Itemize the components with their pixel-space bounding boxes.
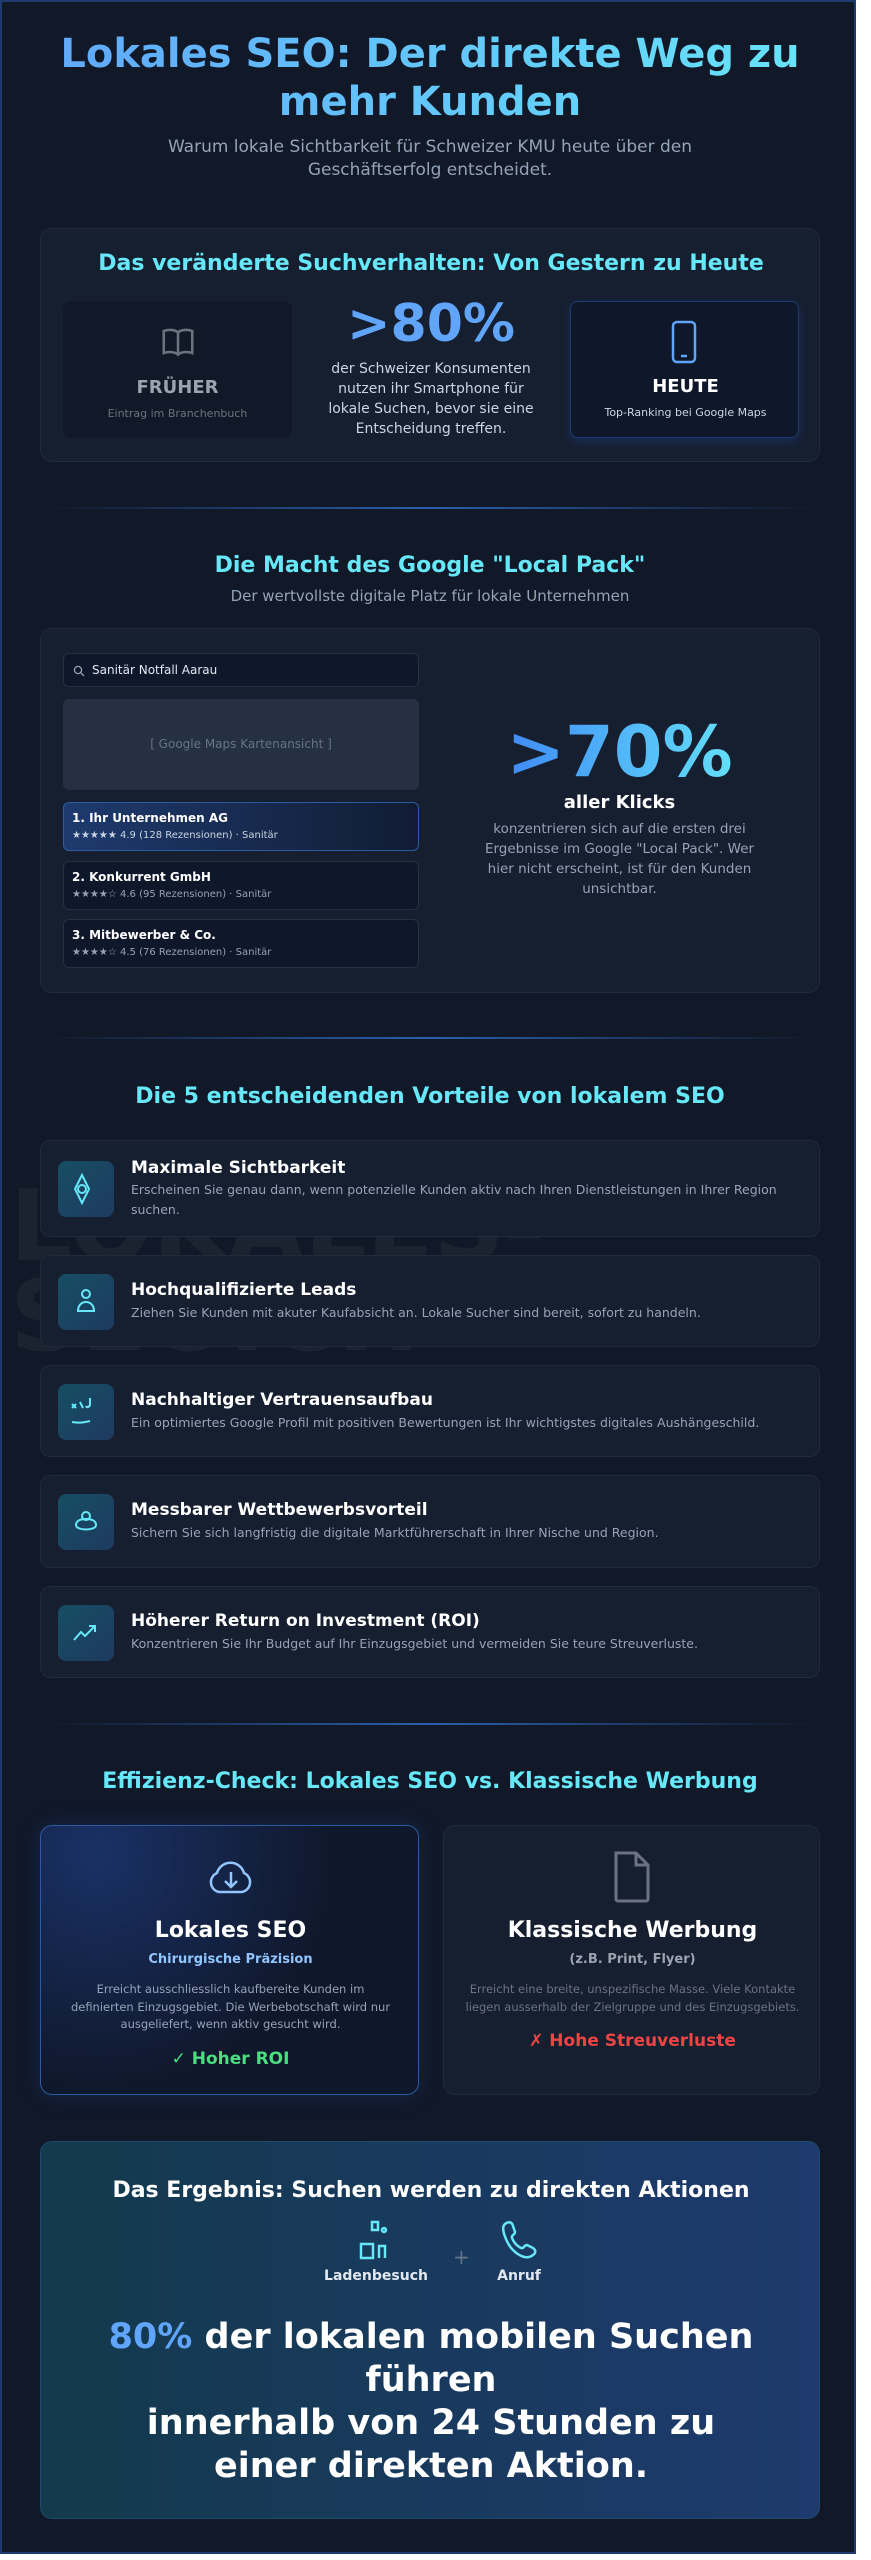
result 2: 2. Konkurrent GmbH (72, 870, 211, 884)
card: wettbewerb (40, 1475, 820, 1568)
subtitle: Warum lokale Sichtbarkeit für Schweizer KMU heute über den Geschäftserfolg entscheidet. (168, 137, 692, 180)
heading: Das Ergebnis: Suchen werden zu direkten Aktionen (112, 2178, 750, 2203)
watermark: SEO.CH (10, 1260, 420, 1374)
heading: efficiency: Effizienz-Check: Lokales SEO vs. Klassische Werbung (102, 1769, 758, 1794)
result 3 (63, 919, 419, 968)
result 3: 3. Mitbewerber & Co. (72, 928, 216, 942)
title: mehr Kunden (279, 79, 581, 125)
panel: result (40, 2141, 820, 2519)
icon: cloud download (210, 1862, 252, 1894)
card: vertrauen: Ein optimiertes Google Profil mit positiven Bewertungen ist Ihr wichtigstes digitales Aushängeschild. (131, 1415, 759, 1430)
icon: call: Anruf (497, 2268, 541, 2284)
search bar (63, 653, 419, 687)
stat 70%: aller Klicks (564, 792, 675, 813)
box: früher: Eintrag im Branchenbuch (108, 407, 247, 420)
card: wettbewerb: Messbarer Wettbewerbsvorteil (131, 1500, 428, 1520)
search bar: Sanitär Notfall Aarau (92, 663, 217, 677)
panel: lokales seo (40, 1825, 419, 2095)
icon: book (162, 328, 194, 356)
heading: Das veränderte Suchverhalten: Von Gestern zu Heute (98, 251, 764, 276)
title: Lokales SEO: Der direkte Weg zu (60, 31, 800, 77)
stat 80%: >80% (347, 294, 515, 354)
stat 80% (328, 294, 534, 437)
heading: local pack: Die Macht des Google "Local Pack" (215, 553, 645, 578)
card: sichtbarkeit: Erscheinen Sie genau dann, wenn potenzielle Kunden aktiv nach Ihren Dienstleistungen in Ihrer Region suchen. (131, 1182, 777, 1217)
big statement: 80% der lokalen mobilen Suchen (109, 2317, 753, 2357)
box: heute: HEUTE (652, 376, 719, 397)
card: roi: Konzentrieren Sie Ihr Budget auf Ihr Einzugsgebiet und vermeiden Sie teure Streuverluste. (131, 1636, 698, 1651)
panel: klassische werbung: ✗ Hohe Streuverluste (529, 2031, 736, 2051)
watermark (10, 1170, 545, 1374)
panel: klassische werbung: (z.B. Print, Flyer) (569, 1952, 696, 1967)
big statement: innerhalb von 24 Stunden zu (147, 2403, 715, 2443)
box: heute (570, 301, 799, 438)
stat 80%: der Schweizer Konsumenten nutzen ihr Smartphone für lokale Suchen, bevor sie eine Entscheidung treffen. (328, 361, 534, 437)
panel: lokales seo: Erreicht ausschliesslich kaufbereite Kunden im definierten Einzugsgebiet. Die Werbebotschaft wird nur ausgeliefert, wenn aktiv gesucht wird. (71, 1982, 390, 2031)
result 1: 1. Ihr Unternehmen AG (72, 811, 228, 825)
card: wettbewerb: Sichern Sie sich langfristig die digitale Marktführerschaft in Ihrer Nische und Region. (131, 1525, 659, 1540)
subheading: Der wertvollste digitale Platz für lokale Unternehmen (231, 587, 629, 605)
map placeholder (63, 699, 419, 790)
stat 70%: >70% (506, 711, 733, 793)
box: früher (63, 301, 292, 438)
panel: lokales seo: ✓ Hoher ROI (172, 2049, 289, 2069)
result 2 (63, 861, 419, 910)
panel: lokales seo: Chirurgische Präzision (148, 1952, 313, 1967)
result 3: ★★★★☆ 4.5 (76 Rezensionen) · Sanitär (72, 947, 271, 958)
card: sichtbarkeit: Maximale Sichtbarkeit (131, 1158, 345, 1178)
big statement: führen (366, 2360, 496, 2400)
card: leads (40, 1255, 820, 1347)
card: leads: Ziehen Sie Kunden mit akuter Kaufabsicht an. Lokale Sucher sind bereit, sofort zu handeln. (131, 1305, 701, 1320)
icon: phone (672, 320, 696, 364)
box: heute: Top-Ranking bei Google Maps (604, 406, 767, 419)
card: roi (40, 1586, 820, 1678)
icon: document (614, 1852, 650, 1902)
icon: magnifier (74, 666, 84, 676)
card: vertrauen: Nachhaltiger Vertrauensaufbau (131, 1390, 433, 1410)
map placeholder: [ Google Maps Kartenansicht ] (150, 737, 332, 751)
panel: klassische werbung: Erreicht eine breite, unspezifische Masse. Viele Kontakte liegen ausserhalb der Zielgruppe und des Einzugsgebiets. (466, 1982, 799, 2014)
icon: store visit (324, 2220, 428, 2284)
plus: + (453, 2245, 470, 2269)
icon: call (497, 2221, 541, 2284)
box: früher: FRÜHER (136, 377, 218, 398)
watermark: LOKALES- (10, 1170, 545, 1284)
card: leads: Hochqualifizierte Leads (131, 1280, 356, 1300)
panel: lokales seo: Lokales SEO (155, 1918, 306, 1943)
panel: search behavior (40, 228, 820, 462)
big statement (109, 2317, 753, 2486)
card: vertrauen (40, 1365, 820, 1457)
result 1: ★★★★★ 4.9 (128 Rezensionen) · Sanitär (72, 830, 278, 841)
card: roi: Höherer Return on Investment (ROI) (131, 1611, 480, 1631)
panel: klassische werbung: Klassische Werbung (508, 1918, 757, 1943)
result 2: ★★★★☆ 4.6 (95 Rezensionen) · Sanitär (72, 889, 271, 900)
panel: local pack (40, 628, 820, 993)
stat 70%: konzentrieren sich auf die ersten drei Ergebnisse im Google "Local Pack". Wer hier nicht erscheint, ist für den Kunden unsichtbar. (485, 821, 754, 897)
icon: store visit: Ladenbesuch (324, 2268, 428, 2284)
title (2, 30, 858, 126)
stat 70% (485, 711, 754, 897)
big statement: einer direkten Aktion. (214, 2446, 648, 2486)
heading: 5 advantages: Die 5 entscheidenden Vorteile von lokalem SEO (135, 1084, 725, 1109)
result 1 (63, 802, 419, 851)
card: sichtbarkeit (40, 1140, 820, 1237)
panel: klassische werbung (443, 1825, 820, 2095)
